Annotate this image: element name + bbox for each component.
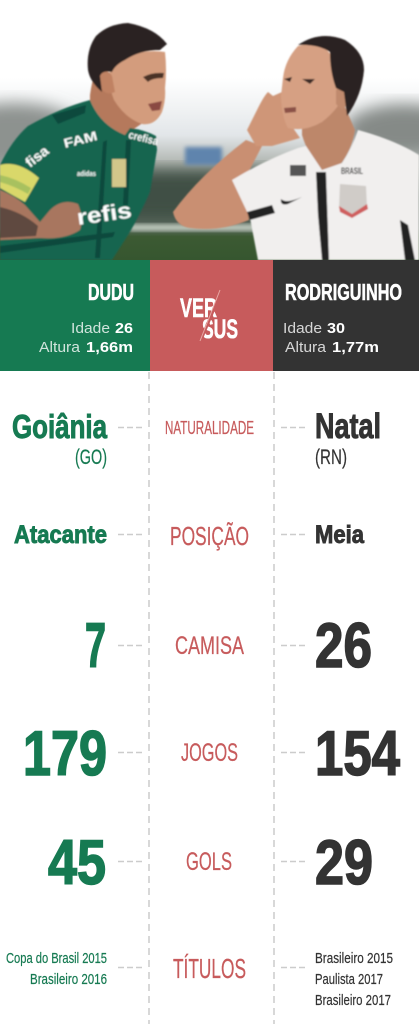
- row: títulos: Brasileiro 2016: [30, 971, 107, 988]
- versus logotype: [180, 290, 238, 344]
- jersey lettering: crefisa: [127, 129, 160, 148]
- row: títulos: Paulista 2017: [315, 971, 383, 988]
- row: gols: 29: [315, 828, 373, 898]
- row: posição: Meia: [315, 521, 365, 549]
- row: posição: Atacante: [14, 521, 107, 549]
- row: gols: [48, 828, 373, 898]
- row: posição: [14, 521, 365, 551]
- versus logotype: VER: [180, 293, 217, 323]
- stat: age and height: Idade: [71, 320, 110, 337]
- row: camisa: 26: [315, 611, 372, 681]
- row: jogos: JOGOS: [181, 739, 238, 767]
- row: posição: POSIÇÃO: [170, 521, 249, 551]
- row: gols: 45: [48, 828, 106, 898]
- row: naturalidade: Natal: [315, 407, 381, 446]
- row: naturalidade: (GO): [75, 446, 107, 469]
- jersey lettering: [22, 128, 160, 230]
- row: jogos: 179: [23, 719, 107, 789]
- row: camisa: [85, 611, 372, 681]
- versus logotype: SUS: [202, 314, 238, 344]
- row: títulos: [6, 950, 393, 1009]
- stat: age and height: 1,66m: [86, 339, 133, 356]
- panel: versus header: [150, 260, 273, 371]
- row: títulos: TÍTULOS: [173, 953, 246, 984]
- jersey lettering: refis: [75, 198, 133, 230]
- row: naturalidade: (RN): [315, 446, 347, 469]
- row: jogos: 154: [315, 719, 400, 789]
- stat: age and height: [39, 320, 133, 356]
- row: naturalidade: [12, 407, 381, 469]
- stat: age and height: Idade: [283, 320, 322, 337]
- panel: Rodriguinho header: [273, 260, 419, 371]
- row: gols: GOLS: [186, 848, 232, 876]
- row: naturalidade: Goiânia: [12, 408, 108, 445]
- stat: age and height: 30: [327, 320, 345, 337]
- stat: age and height: Altura: [39, 339, 81, 356]
- row: títulos: Brasileiro 2015: [315, 950, 393, 967]
- row: jogos: [23, 719, 400, 789]
- row: camisa: CAMISA: [175, 632, 244, 660]
- jersey lettering: BRASIL: [341, 166, 363, 176]
- panel: Dudu header: [0, 260, 150, 371]
- stat: age and height: Altura: [285, 339, 327, 356]
- photo: stadium background: [0, 0, 419, 260]
- photo: Dudu in green jersey: [0, 23, 167, 260]
- jersey lettering: FAM: [62, 128, 99, 151]
- row: títulos: Copa do Brasil 2015: [6, 950, 107, 967]
- row: naturalidade: NATURALIDADE: [165, 418, 254, 438]
- name: Dudu: DUDU: [88, 279, 134, 305]
- photo: Rodriguinho in white jersey: [173, 36, 419, 260]
- stat: age and height: 26: [115, 320, 133, 337]
- jersey lettering: adidas: [77, 171, 96, 178]
- stat: age and height: [283, 320, 379, 356]
- row: títulos: Brasileiro 2017: [315, 992, 391, 1009]
- row: camisa: 7: [85, 611, 106, 681]
- stat: age and height: 1,77m: [332, 339, 379, 356]
- jersey lettering: fisa: [22, 142, 52, 170]
